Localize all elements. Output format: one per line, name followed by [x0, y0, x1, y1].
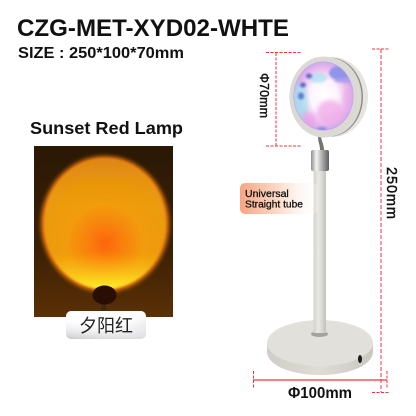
lamp product image	[267, 56, 373, 375]
lamp colour heading: Sunset Red Lamp	[30, 118, 183, 138]
lamp silhouette	[92, 286, 116, 304]
dimension: base diameter	[253, 371, 387, 402]
callout: universal straight tube: Straight tube	[245, 198, 303, 210]
lamp head	[290, 56, 368, 138]
dimension: head diameter	[257, 52, 302, 146]
callout: universal straight tube: Universal	[245, 188, 289, 200]
colour label: 夕阳红	[79, 316, 133, 336]
collar	[311, 150, 329, 171]
dimension: head diameter: Φ70mm	[257, 73, 271, 118]
neck joint	[318, 137, 324, 150]
base	[267, 318, 373, 375]
colour label	[66, 311, 146, 339]
dimension: height: 250mm	[383, 167, 399, 219]
title: CZG-MET-XYD02-WHTE	[17, 15, 289, 42]
size subtitle: SIZE : 250*100*70mm	[18, 45, 184, 62]
sunset lamp photo	[34, 146, 173, 317]
dimension: base diameter: Φ100mm	[288, 385, 352, 402]
callout: universal straight tube	[240, 183, 318, 214]
tube	[314, 170, 326, 330]
